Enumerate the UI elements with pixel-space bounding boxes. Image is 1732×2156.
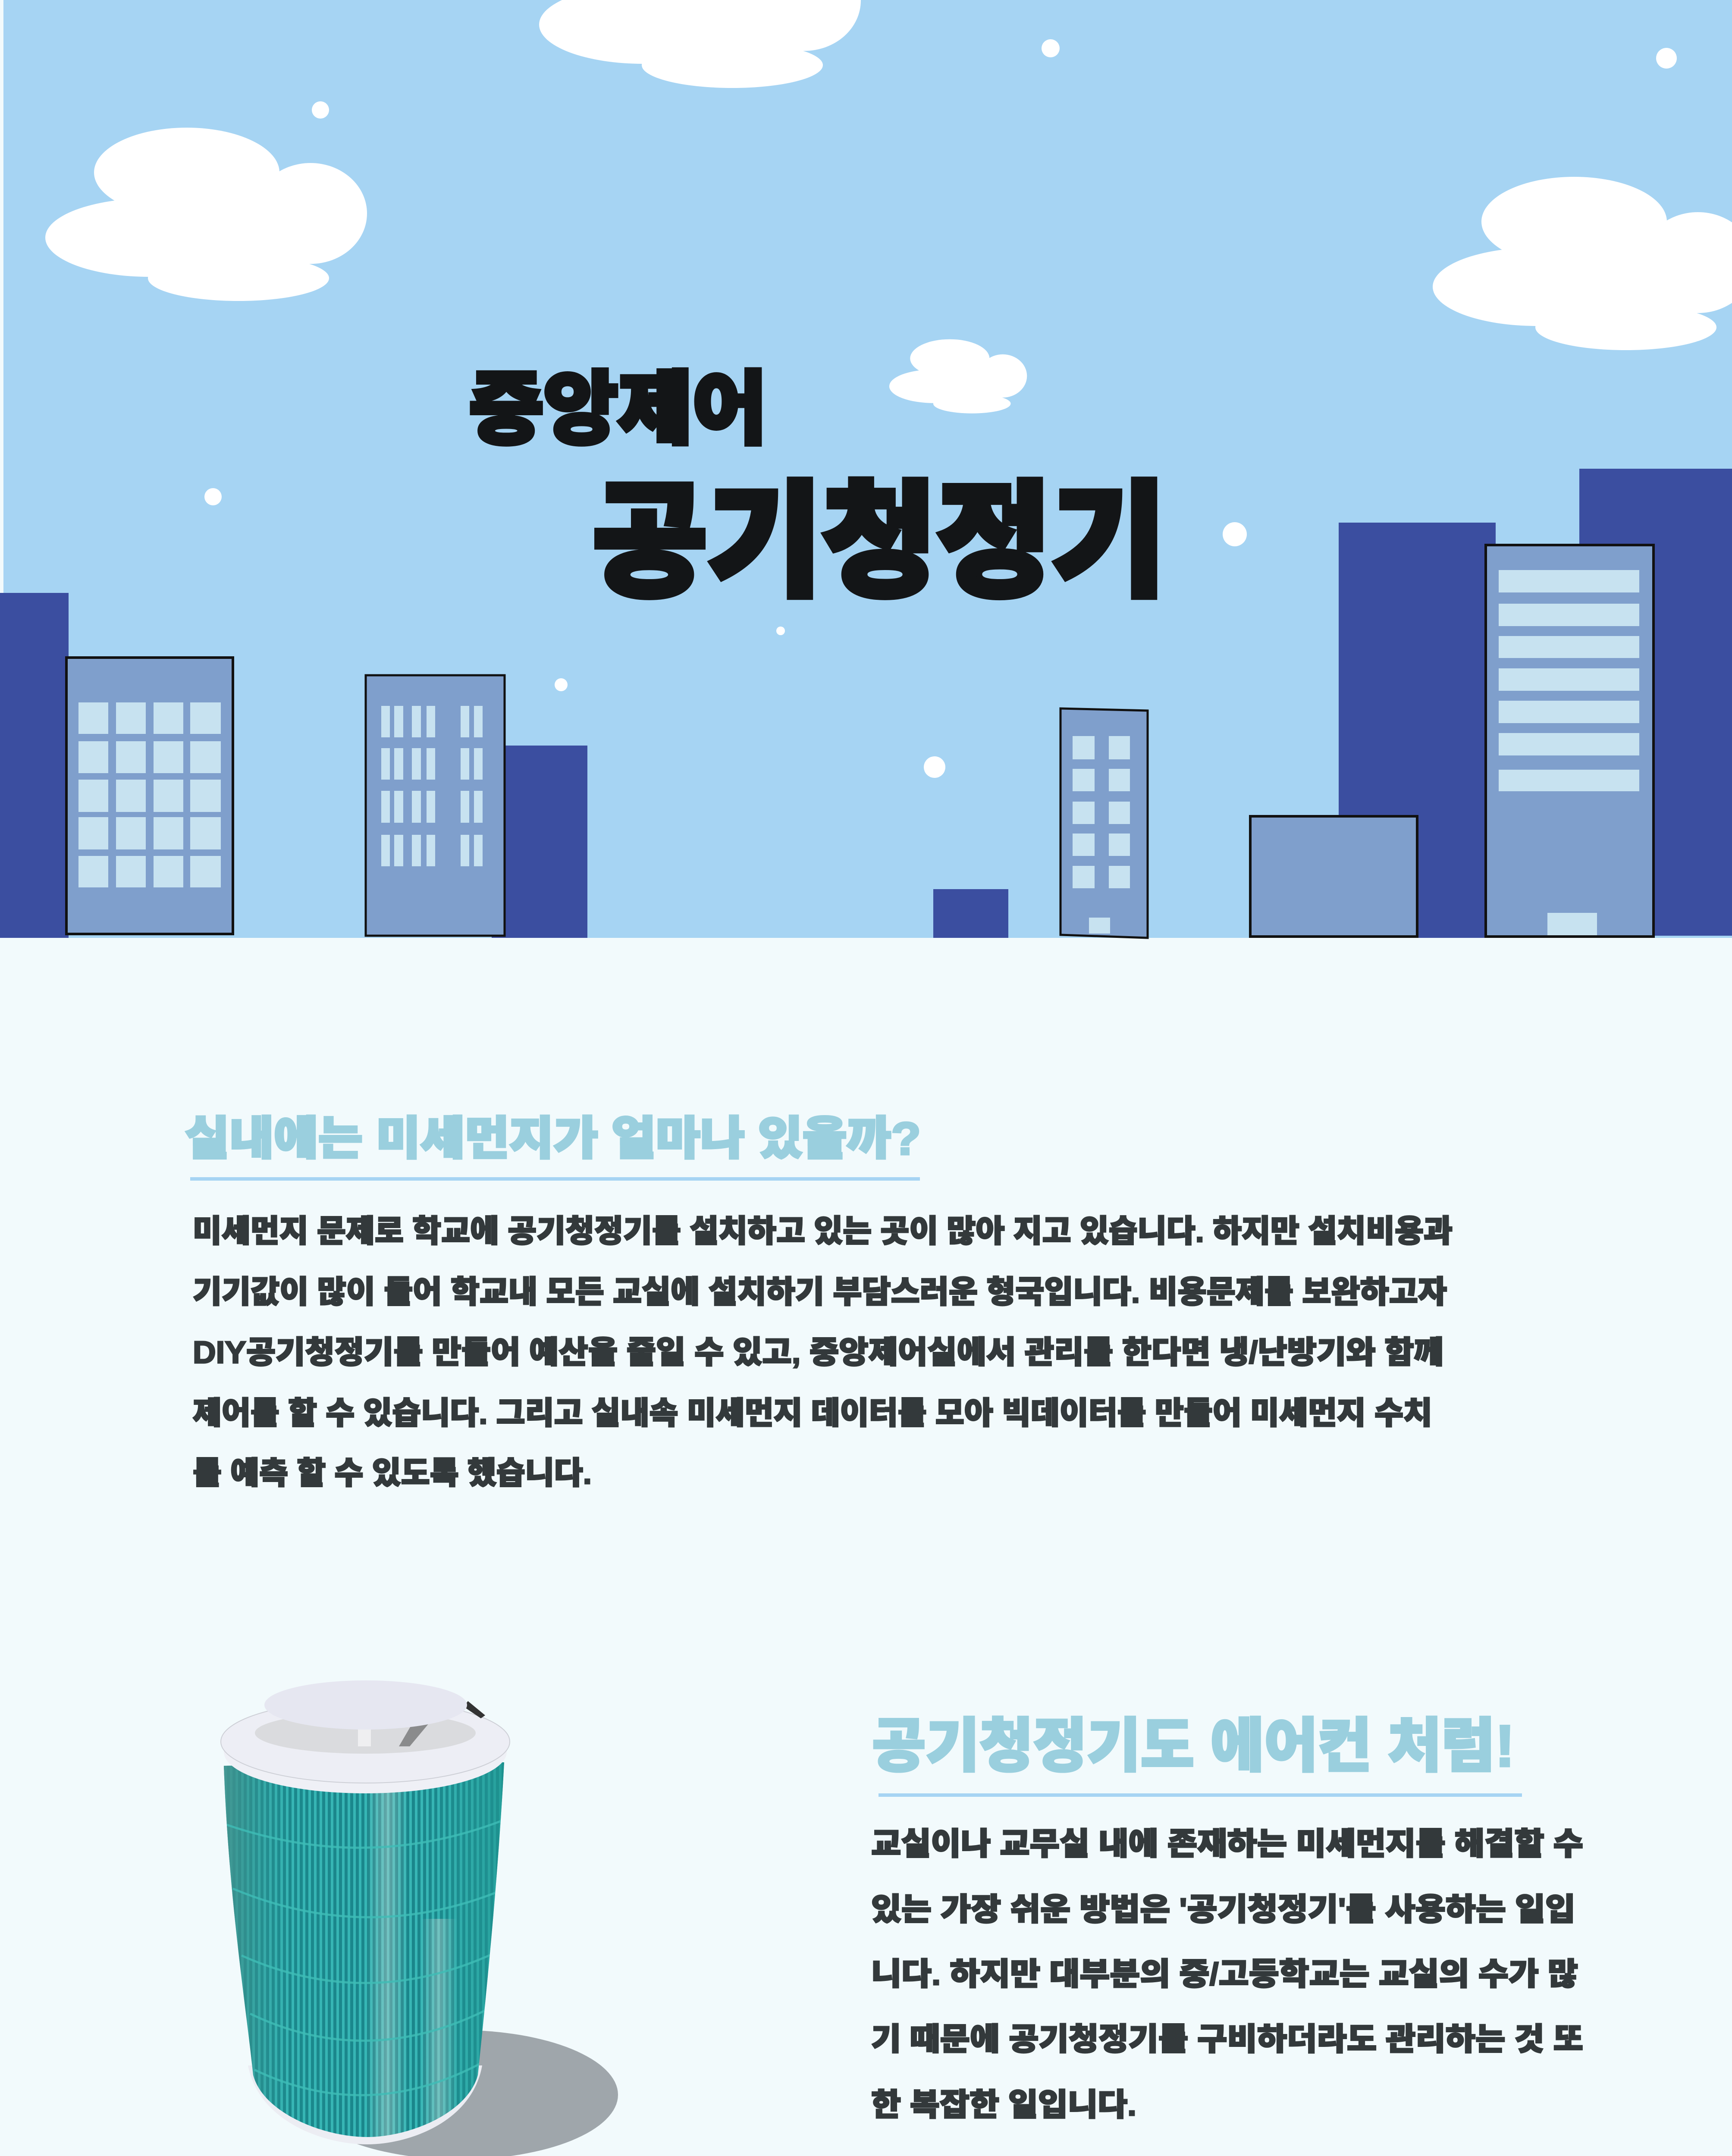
panel: sky header — [0, 0, 1732, 938]
building: small centre — [1061, 708, 1148, 938]
building: left grid — [66, 658, 233, 934]
heading: 실내에는 미세먼지가 얼마나 있을까? — [185, 1113, 921, 1164]
building: tall right — [1486, 545, 1654, 937]
title — [469, 365, 1166, 612]
body text: 기기값이 많이 들어 학교내 모든 교실에 설치하기 부담스러운 형국입니다. 비용문제를 보완하고자 — [193, 1275, 1447, 1310]
section: intro — [185, 1113, 1453, 1491]
building: low box — [1250, 816, 1417, 937]
body text: 교실이나 교무실 내에 존재하는 미세먼지를 해결할 수 — [871, 1827, 1583, 1861]
purifier shadow — [301, 2030, 618, 2156]
dark buildings — [0, 469, 1732, 938]
body text: 제어를 할 수 있습니다. 그리고 실내속 미세먼지 데이터를 모아 빅데이터를 만들어 미세먼지 수치 — [193, 1396, 1432, 1431]
purifier bottom rim — [248, 2065, 482, 2144]
body text: 한 복잡한 일입니다. — [871, 2088, 1136, 2122]
body text — [871, 1827, 1583, 2122]
cloud: top — [539, 0, 861, 88]
body text: 있는 가장 쉬운 방법은 '공기청정기'를 사용하는 일입 — [871, 1893, 1575, 1927]
cloud: small centre — [889, 339, 1027, 414]
cloud: left — [45, 128, 367, 301]
illustration: air purifier filter — [216, 1680, 618, 2156]
heading: 공기청정기도 에어컨 처럼! — [872, 1713, 1515, 1779]
section: air conditioner — [871, 1713, 1583, 2122]
purifier cap — [264, 1680, 467, 1730]
body text: 기 때문에 공기청정기를 구비하더라도 관리하는 것 또 — [871, 2022, 1583, 2057]
building: narrow windows — [366, 675, 505, 936]
purifier filter body — [216, 1759, 513, 2143]
body text: 니다. 하지만 대부분의 중/고등학교는 교실의 수가 많 — [871, 1957, 1578, 1992]
body text — [193, 1214, 1453, 1491]
body text: DIY공기청정기를 만들어 예산을 줄일 수 있고, 중앙제어실에서 관리를 한다면 냉/난방기와 함께 — [193, 1335, 1443, 1370]
cloud: right — [1433, 177, 1732, 350]
title line 1: 중앙제어 — [469, 365, 767, 454]
purifier air gap — [255, 1712, 476, 1754]
purifier top rim — [224, 1711, 507, 1793]
title line 2: 공기청정기 — [593, 472, 1166, 612]
body text: 미세먼지 문제로 학교에 공기청정기를 설치하고 있는 곳이 많아 지고 있습니다. 하지만 설치비용과 — [193, 1214, 1453, 1249]
body text: 를 예측 할 수 있도록 했습니다. — [193, 1456, 592, 1491]
snow dots — [204, 39, 1677, 778]
